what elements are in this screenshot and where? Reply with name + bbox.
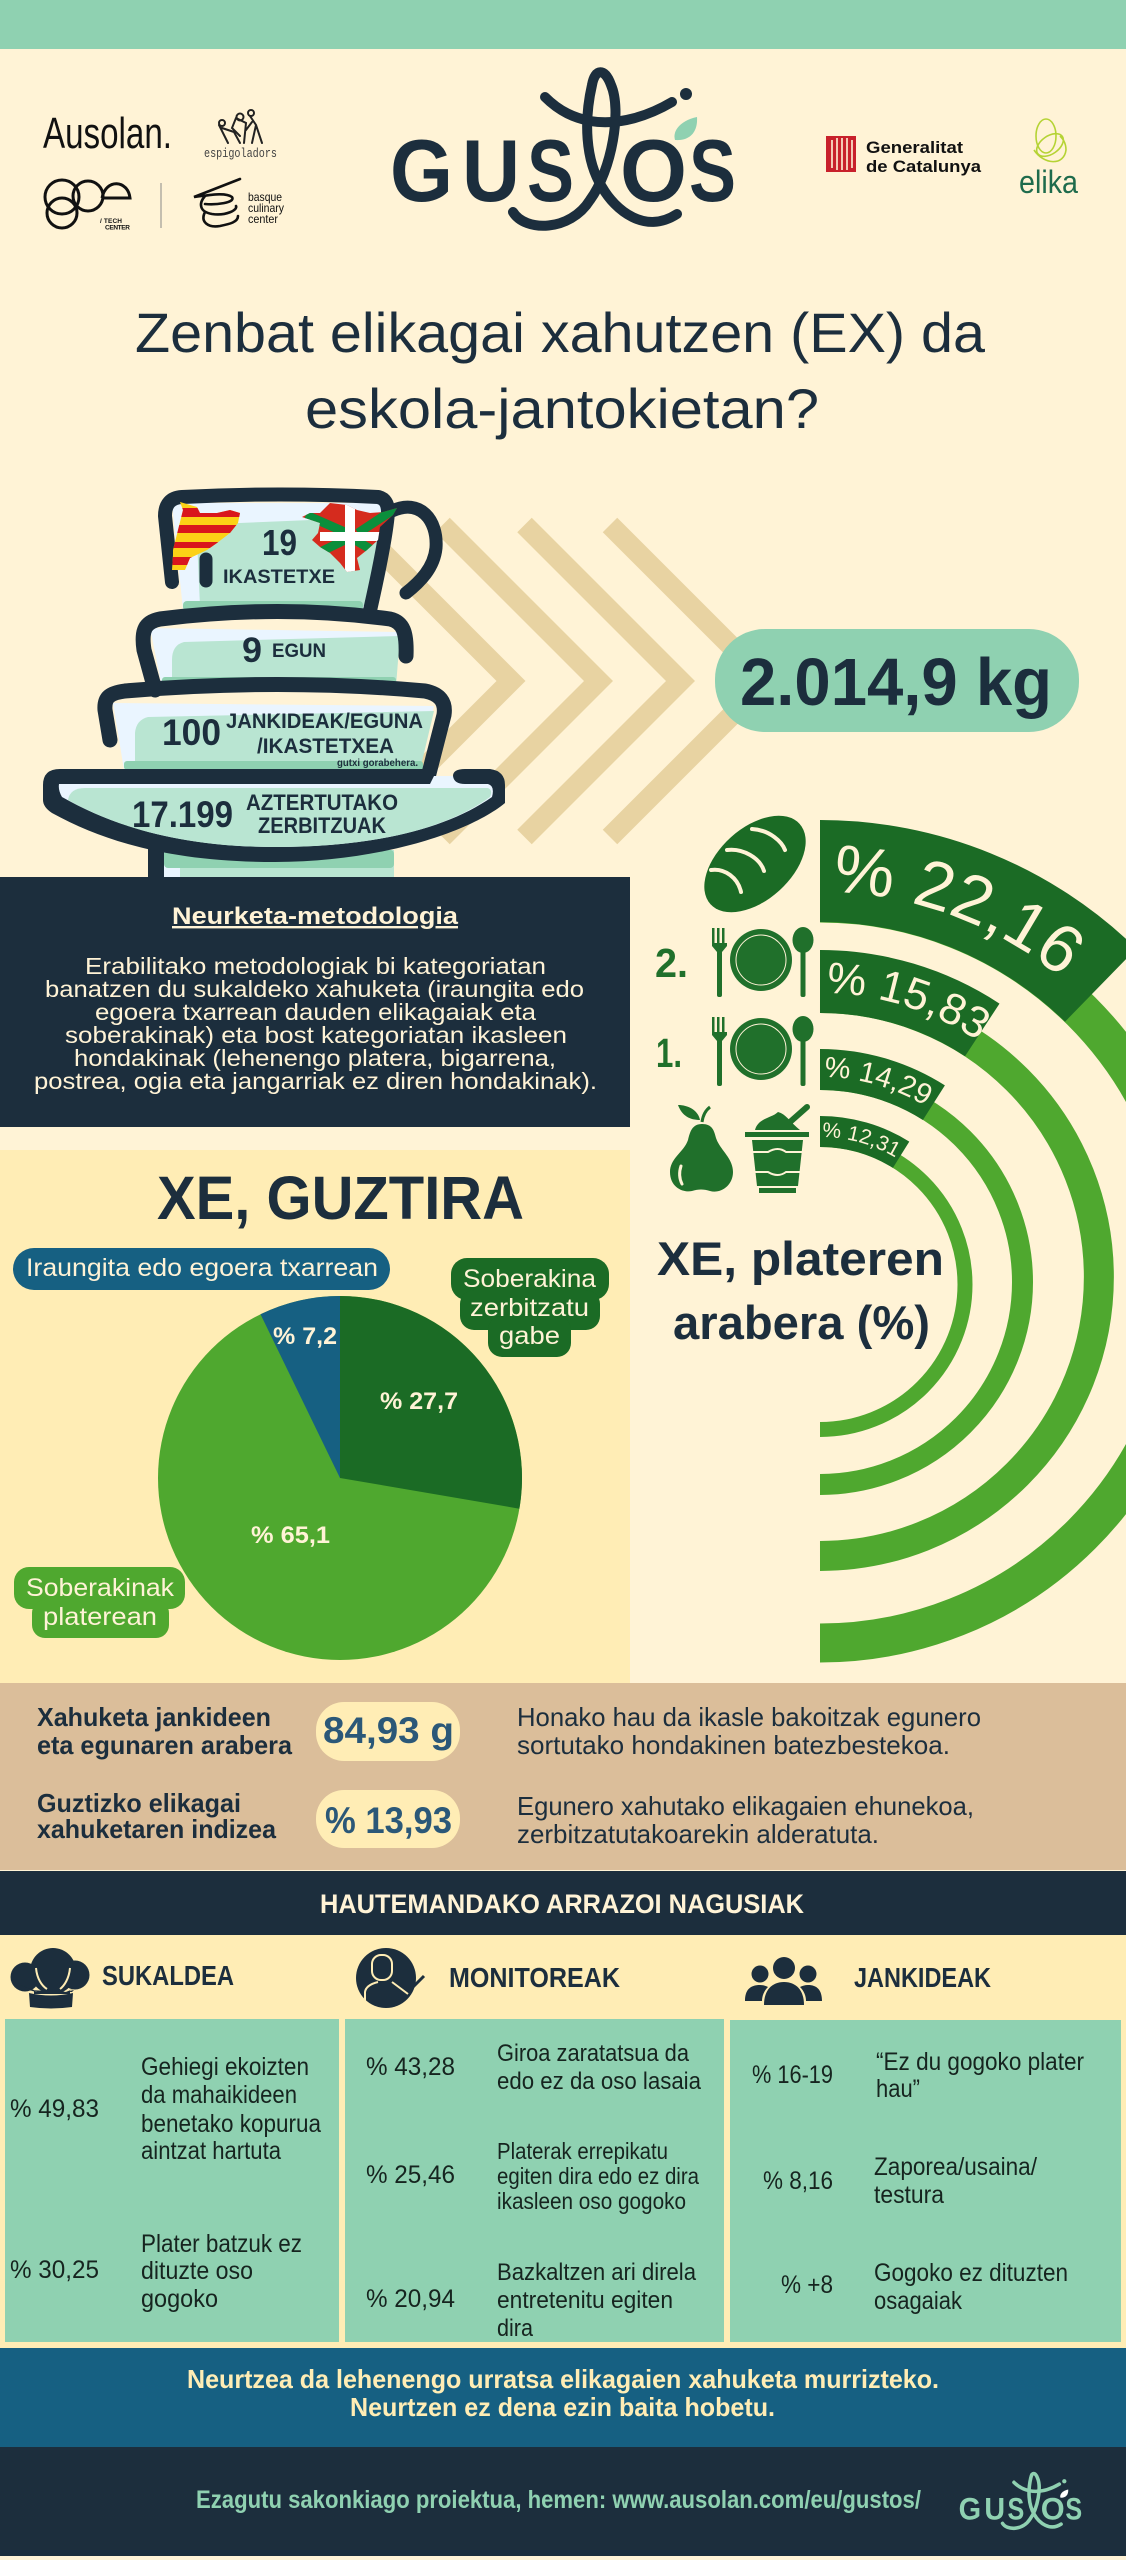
- reason: dishes disliked: gogoko: [141, 2285, 218, 2313]
- panel: total pie: [0, 1150, 630, 1683]
- metric: waste index: xahuketaren indizea: [37, 1814, 277, 1844]
- reason: ingredients: osagaiak: [874, 2287, 962, 2315]
- dish: plate, 17.199 zerbitzu: AZTERTUTAKO: [246, 790, 398, 815]
- logo: basque culinary center: center: [248, 212, 278, 226]
- metric: waste index: Guztizko elikagai: [37, 1788, 241, 1818]
- callout: expired: Iraungita edo egoera txarrean: [26, 1254, 378, 1282]
- top band: [0, 0, 1126, 49]
- heading: monitors: MONITOREAK: [449, 1962, 620, 1993]
- reason: overproduction: da mahaikideen: [141, 2081, 297, 2109]
- pie chart: [158, 1296, 522, 1660]
- dish: bowl, 9 egun: [143, 612, 406, 690]
- reason: dislike dish: hau”: [876, 2075, 920, 2103]
- reason: dishes disliked: Plater batzuk ez: [141, 2230, 302, 2258]
- banner: measuring message: Neurtzea da lehenengo urratsa elikagaien xahuketa murrizteko.: [187, 2364, 939, 2394]
- callout: plate leftovers: Soberakinak: [26, 1574, 175, 1602]
- callout: not served: [451, 1258, 609, 1357]
- callout: plate leftovers: [14, 1567, 185, 1638]
- footer: [0, 2447, 1126, 2556]
- divider: [160, 183, 162, 228]
- logo: Gustos small: G: [959, 2491, 981, 2526]
- logo: basque culinary center: basque: [248, 190, 282, 204]
- methodology text: [34, 953, 597, 1094]
- metric: waste per diner: eta egunaren arabera: [37, 1730, 293, 1760]
- reason: repeated: ikasleen oso gogoko: [497, 2188, 686, 2214]
- logo: Gustos main: O: [620, 121, 687, 220]
- reason: overproduction: aintzat hartuta: [141, 2137, 281, 2165]
- metric: waste per diner: Xahuketa jankideen: [37, 1702, 271, 1732]
- pie chart: % 27,7: [380, 1388, 458, 1415]
- logo: espigoladors: espigoladors: [204, 146, 277, 161]
- arc: dessert 12,31: [820, 1116, 972, 1437]
- dish: bowl, 9 egun: 9: [242, 631, 262, 670]
- reason: distracted: entretenitu egiten: [497, 2287, 673, 2314]
- reason: dishes disliked: dituzte oso: [141, 2257, 253, 2285]
- reason: taste: Zaporea/usaina/: [874, 2153, 1037, 2181]
- reason: distracted: [366, 2259, 697, 2342]
- arc: bread 22,16: % 22,16: [838, 846, 1082, 972]
- reason: distracted: % 20,94: [366, 2285, 455, 2313]
- heading: XE by dish: arabera (%): [673, 1296, 930, 1349]
- icon: second course: 2.: [655, 940, 688, 986]
- reason: overproduction: % 49,83: [10, 2095, 99, 2123]
- dish: cup, 19 ikastetxe: 19: [262, 522, 297, 563]
- logo: espigoladors: [204, 110, 277, 161]
- heading: XE by dish: [657, 1232, 944, 1349]
- logo: Gustos small: S: [1065, 2491, 1082, 2526]
- reason: ingredients: [781, 2259, 1068, 2315]
- total pill: 2.014,9 kg: 2.014,9 kg: [740, 645, 1052, 720]
- dish: cup, 19 ikastetxe: [165, 494, 436, 615]
- arc: second course 15,83: % 15,83: [829, 962, 989, 1037]
- dish: plate, 17.199 zerbitzu: [43, 769, 505, 862]
- dish: bowl, 9 egun: EGUN: [272, 641, 326, 662]
- methodology heading: Neurketa-metodologia: [172, 903, 459, 930]
- reason: dislike dish: “Ez du gogoko plater: [876, 2048, 1084, 2076]
- title: Zenbat elikagai xahutzen (EX) da: [135, 301, 986, 364]
- dish: bowl, 100 jankideak: /IKASTETXEA: [257, 735, 394, 758]
- total pill: 2.014,9 kg: [715, 629, 1079, 732]
- arrows: chevrons: [355, 525, 766, 837]
- logo: Gustos small: S: [1008, 2491, 1024, 2526]
- logo: goe tech center: [45, 180, 130, 232]
- reason: overproduction: benetako kopurua: [141, 2110, 321, 2138]
- reason: repeated: Platerak errepikatu: [497, 2138, 668, 2164]
- methodology text: postrea, ogia eta jangarriak ez diren hondakinak).: [34, 1068, 597, 1094]
- arc: first course 14,29: [820, 1049, 1033, 1495]
- box: monitor reasons: [345, 2019, 724, 2342]
- dish: plate, 17.199 zerbitzu: ZERBITZUAK: [258, 813, 386, 838]
- dish: plate, 17.199 zerbitzu: 17.199: [132, 794, 233, 835]
- methodology text: egoera txarrean dauden elikagaiak eta: [95, 999, 536, 1025]
- dish: foot under plate: [148, 848, 394, 878]
- logo: basque culinary center: [194, 179, 284, 226]
- reason: noisy: % 43,28: [366, 2053, 455, 2081]
- metric: waste index: Egunero xahutako elikagaien ehunekoa,: [517, 1791, 974, 1821]
- metric: waste per diner: [37, 1702, 981, 1761]
- methodology text: hondakinak (lehenengo platera, bigarrena,: [74, 1045, 556, 1071]
- panel: reasons: [0, 1935, 1126, 2348]
- reason: taste: % 8,16: [763, 2167, 833, 2195]
- icon: yogurt: [745, 1107, 809, 1193]
- reason: distracted: Bazkaltzen ari direla: [497, 2259, 697, 2286]
- logo: Generalitat de Catalunya: Generalitat: [866, 138, 963, 157]
- title: [135, 301, 986, 440]
- heading: XE by dish: XE, plateren: [657, 1232, 944, 1285]
- logo: goe tech center: CENTER: [105, 224, 130, 232]
- reason: repeated: [366, 2138, 699, 2214]
- metric: waste index: zerbitzatutakoarekin alderatuta.: [517, 1819, 879, 1849]
- callout: plate leftovers: platerean: [43, 1603, 157, 1631]
- callout: expired: [13, 1248, 390, 1290]
- reason: dislike dish: % 16-19: [752, 2061, 833, 2089]
- arc: bread 22,16: [820, 820, 1126, 1662]
- icon: first course: [656, 1016, 814, 1086]
- arc: first course 14,29: % 14,29: [826, 1057, 932, 1103]
- heading: diners: JANKIDEAK: [854, 1962, 991, 1993]
- heading band: main reasons: HAUTEMANDAKO ARRAZOI NAGUSIAK: [320, 1889, 804, 1919]
- methodology text: Erabilitako metodologiak bi kategoriatan: [85, 953, 546, 979]
- logo: goe tech center: / TECH: [100, 218, 122, 225]
- reason: repeated: egiten dira edo ez dira: [497, 2163, 699, 2189]
- reason: noisy: [366, 2040, 702, 2095]
- panel: methodology: [0, 877, 630, 1127]
- logo: Generalitat de Catalunya: de Catalunya: [866, 157, 982, 176]
- reason: taste: testura: [874, 2181, 944, 2209]
- dish: cup, 19 ikastetxe: IKASTETXE: [223, 567, 335, 588]
- icon: pear: [670, 1105, 733, 1192]
- logo: Generalitat de Catalunya: [826, 136, 982, 176]
- logo: basque culinary center: culinary: [248, 201, 284, 215]
- logo: Gustos small: [959, 2473, 1082, 2528]
- heading: kitchen: SUKALDEA: [102, 1960, 234, 1991]
- icon: second course: [655, 927, 814, 997]
- reason: noisy: Giroa zaratatsua da: [497, 2040, 690, 2067]
- banner: measuring message: [0, 2348, 1126, 2447]
- partner logos left: [43, 109, 284, 232]
- logo: Gustos main: S: [527, 121, 574, 220]
- reason: distracted: dira: [497, 2315, 534, 2342]
- metric: waste per diner: 84,93 g: [323, 1710, 454, 1751]
- reason: dishes disliked: [10, 2230, 302, 2313]
- icon: first course: 1.: [656, 1030, 682, 1076]
- icon: diners: [745, 1957, 822, 2005]
- metric: waste index: % 13,93: [325, 1800, 452, 1841]
- arc: second course 15,83: [820, 950, 1114, 1571]
- callout: not served: Soberakina: [463, 1265, 596, 1293]
- icon: monitor: [356, 1948, 424, 2008]
- chart: food waste by dish (arcs): [820, 820, 1126, 1662]
- metric: waste per diner: Honako hau da ikasle bakoitzak egunero: [517, 1702, 981, 1732]
- flag map: Basque Country: [302, 503, 397, 572]
- logo: Ausolan: Ausolan.: [43, 109, 172, 158]
- metric: waste index: [37, 1788, 974, 1849]
- pie chart: % 7,2: [273, 1323, 337, 1350]
- logo: Gustos small: U: [984, 2491, 1005, 2526]
- arc: dessert 12,31: % 12,31: [824, 1122, 898, 1158]
- reason: overproduction: Gehiegi ekoizten: [141, 2053, 309, 2081]
- methodology text: soberakinak) eta bost kategoriatan ikasleen: [65, 1022, 567, 1048]
- logo: elika: [1019, 119, 1078, 200]
- dish: bowl, 100 jankideak: [105, 684, 444, 785]
- pie heading: XE, GUZTIRA: [157, 1164, 524, 1232]
- dish: bowl, 100 jankideak: JANKIDEAK/EGUNA: [226, 710, 423, 733]
- reason: taste: [763, 2153, 1037, 2209]
- title: eskola-jantokietan?: [305, 377, 819, 440]
- reason: overproduction: [10, 2053, 321, 2165]
- reason: dislike dish: [752, 2048, 1084, 2103]
- heading band: main reasons: [0, 1871, 1126, 1935]
- box: kitchen reasons: [5, 2019, 339, 2342]
- reason: ingredients: % +8: [781, 2271, 833, 2299]
- reason: noisy: edo ez da oso lasaia: [497, 2068, 702, 2095]
- logo: Gustos main: U: [462, 121, 520, 220]
- logo: elika: elika: [1019, 164, 1078, 200]
- logo: Gustos small: O: [1041, 2491, 1065, 2526]
- logo: Gustos main: S: [689, 121, 736, 220]
- dish: bowl, 100 jankideak: gutxi gorabehera.: [337, 758, 418, 769]
- box: diner reasons: [730, 2020, 1121, 2342]
- footer link text: Ezagutu sakonkiago proiektua, hemen: www.ausolan.com/eu/gustos/: [196, 2486, 921, 2514]
- banner: measuring message: Neurtzen ez dena ezin baita hobetu.: [350, 2392, 775, 2422]
- callout: not served: gabe: [499, 1322, 560, 1350]
- dish: bowl, 100 jankideak: 100: [162, 712, 221, 753]
- panel: key metrics: [0, 1683, 1126, 1870]
- flag map: Catalonia: [172, 502, 240, 570]
- icon: chef hat: [10, 1948, 90, 2008]
- logo: Gustos main: G: [390, 121, 453, 220]
- metric: waste per diner: sortutako hondakinen batezbestekoa.: [517, 1730, 950, 1760]
- icon: bread: [686, 797, 824, 931]
- reason: ingredients: Gogoko ez dituzten: [874, 2259, 1068, 2287]
- methodology text: banatzen du sukaldeko xahuketa (iraungita edo: [45, 976, 584, 1002]
- reason: dishes disliked: % 30,25: [10, 2256, 99, 2284]
- callout: not served: zerbitzatu: [470, 1294, 589, 1322]
- logo: Gustos main: [390, 72, 736, 226]
- reason: repeated: % 25,46: [366, 2161, 455, 2189]
- stacked dishes: [43, 494, 505, 878]
- pie chart: % 65,1: [251, 1522, 330, 1549]
